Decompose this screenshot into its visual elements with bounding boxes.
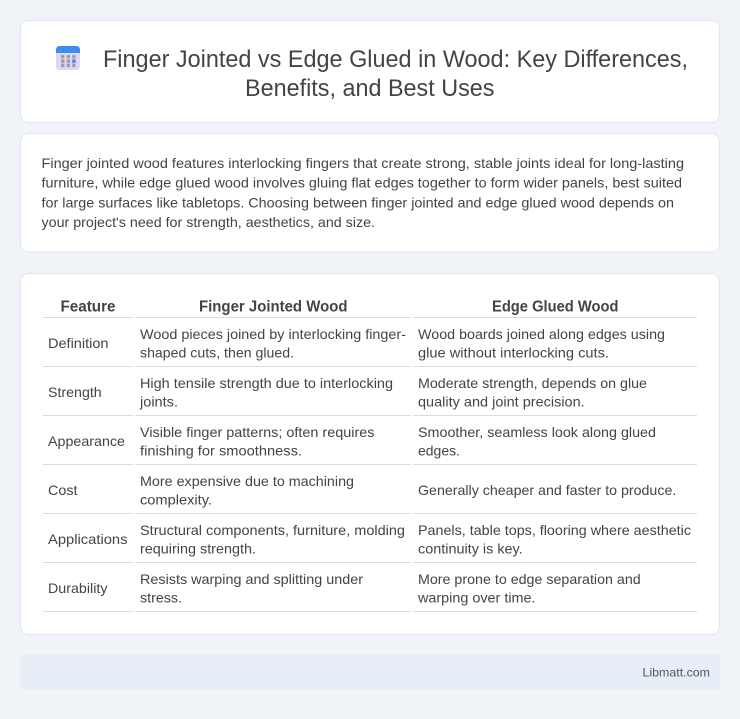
row: durability: Durability	[48, 581, 108, 596]
row: applications: requiring strength.	[140, 541, 256, 556]
row: strength: High tensile strength due to interlocking	[140, 376, 393, 391]
row: cost	[48, 474, 676, 507]
table header: Feature	[60, 299, 116, 316]
row: cost: More expensive due to machining	[140, 474, 354, 489]
row: appearance: finishing for smoothness.	[140, 443, 302, 458]
panel: intro paragraph: your project's need for strength, aesthetics, and size.	[42, 214, 375, 230]
row: strength	[48, 376, 647, 409]
row: strength: Strength	[48, 385, 102, 400]
row: durability: Resists warping and splitting under	[140, 572, 363, 587]
panel: intro paragraph	[20, 134, 720, 252]
title: Benefits, and Best Uses	[245, 75, 494, 102]
icon: calendar	[56, 46, 80, 70]
title	[103, 46, 688, 102]
row: durability: More prone to edge separation and	[418, 572, 641, 587]
row: durability	[48, 572, 641, 605]
row: applications: Panels, table tops, flooring where aesthetic	[418, 523, 691, 538]
panel: comparison table	[20, 274, 720, 634]
row: strength: quality and joint precision.	[418, 394, 585, 409]
row: appearance: Visible finger patterns; often requires	[140, 425, 375, 440]
panel: intro paragraph: for large surfaces like tabletops. Choosing between finger jointed and edge glued wood depends on	[42, 194, 674, 210]
panel: title card	[20, 20, 720, 122]
row: definition: glue without interlocking cuts.	[418, 345, 609, 360]
row: cost: Cost	[48, 483, 78, 498]
row: appearance	[48, 425, 656, 458]
row: cost: Generally cheaper and faster to produce.	[418, 483, 676, 498]
row: durability: stress.	[140, 590, 182, 605]
title: Finger Jointed vs Edge Glued in Wood: Key Differences,	[103, 46, 688, 73]
row: applications: Structural components, furniture, molding	[140, 523, 405, 538]
row: definition: Wood pieces joined by interlocking finger-	[140, 327, 406, 342]
table header: Edge Glued Wood	[492, 299, 618, 316]
footer	[20, 655, 720, 689]
row: definition: Definition	[48, 336, 108, 351]
footer: Libmatt.com	[642, 666, 710, 680]
row: appearance: Appearance	[48, 434, 125, 449]
row: appearance: Smoother, seamless look along glued	[418, 425, 656, 440]
row: definition	[48, 327, 665, 360]
row: applications: Applications	[48, 532, 128, 547]
row: cost: complexity.	[140, 492, 212, 507]
row: durability: warping over time.	[417, 590, 536, 605]
row: appearance: edges.	[418, 443, 460, 458]
row: strength: Moderate strength, depends on glue	[418, 376, 647, 391]
row: definition: Wood boards joined along edges using	[418, 327, 665, 342]
row: applications: continuity is key.	[418, 541, 523, 556]
panel: intro paragraph: Finger jointed wood features interlocking fingers that create strong, stable joints ideal for long-lasting	[42, 155, 684, 171]
row: definition: shaped cuts, then glued.	[140, 345, 294, 360]
table header	[60, 299, 618, 316]
row: strength: joints.	[139, 394, 178, 409]
table header: Finger Jointed Wood	[199, 299, 348, 316]
row: applications	[48, 523, 691, 556]
panel: intro paragraph: furniture, while edge glued wood involves gluing flat edges together to form wider panels, best suited	[42, 175, 682, 191]
